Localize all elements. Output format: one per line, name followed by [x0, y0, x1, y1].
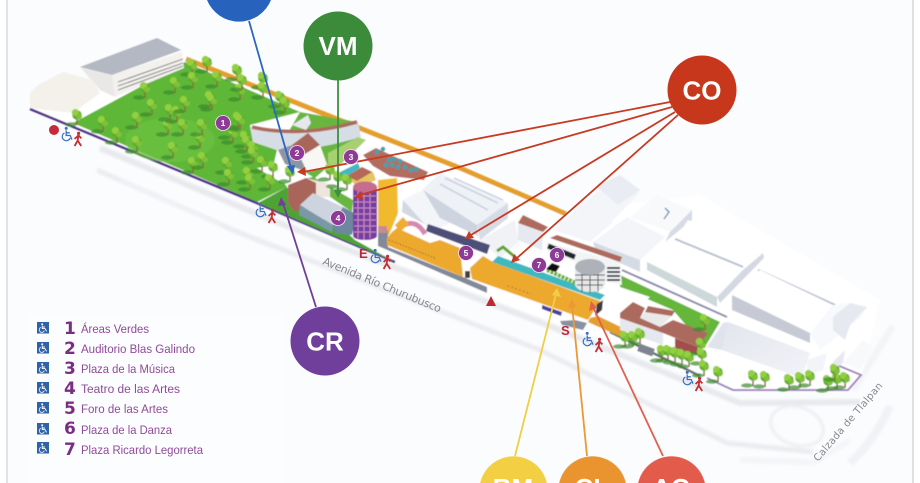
- badge 6: [550, 248, 564, 262]
- legend row 6: Plaza de la Danza: [81, 423, 172, 437]
- badge 4: [330, 210, 346, 226]
- legend row 4: 4: [64, 379, 76, 399]
- access point centre: [256, 203, 275, 223]
- white ground: [30, 55, 880, 391]
- legend: [37, 319, 203, 460]
- auditorium curved roof: [250, 115, 361, 150]
- teal roof: [492, 256, 605, 300]
- green arrow: [334, 80, 342, 198]
- legend row 1: 1: [64, 319, 76, 339]
- central white halls: [402, 173, 545, 268]
- legend row 5: [37, 399, 168, 419]
- legend row 1: [37, 319, 149, 339]
- brown block: [288, 178, 330, 212]
- circle CR: [290, 306, 360, 376]
- green park: [73, 62, 395, 262]
- legend row 1: Áreas Verdes: [81, 321, 149, 336]
- badge 1: 1: [221, 118, 226, 128]
- legend row 3: Plaza de la Música: [81, 362, 175, 376]
- legend row 2: 2: [64, 339, 76, 359]
- badge 5: 5: [464, 248, 469, 258]
- legend row 4: [37, 379, 180, 399]
- circle VM: [304, 12, 372, 80]
- orange arrow: [568, 299, 587, 456]
- access point E: [359, 246, 390, 269]
- orange perimeter strip: [186, 59, 566, 214]
- gray base: [378, 230, 487, 293]
- badge 4: 4: [336, 213, 341, 223]
- legend row 7: 7: [64, 440, 76, 460]
- badge 2: [290, 146, 304, 160]
- right white blocks: [553, 175, 873, 378]
- badge 6: 6: [555, 250, 560, 260]
- access point west: [49, 125, 81, 146]
- yellow arrow: [515, 288, 561, 456]
- circle CL: [558, 456, 626, 483]
- access point S: [561, 323, 602, 352]
- yellow building west: [387, 217, 463, 277]
- blue arrow: [249, 21, 295, 175]
- badge 7: [532, 258, 546, 272]
- legend row 6: [37, 419, 172, 439]
- circle VM: VM: [318, 31, 358, 61]
- parking building: [80, 38, 184, 97]
- red arrows: [297, 102, 678, 263]
- legend row 5: Foro de las Artes: [81, 402, 168, 416]
- Plaza de la Danza building: [546, 235, 622, 285]
- legend row 5: 5: [64, 399, 76, 419]
- category circles: [207, 0, 736, 376]
- red triangle marker: [486, 296, 496, 306]
- legend row 3: 3: [64, 359, 76, 379]
- legend row 7: Plaza Ricardo Legorreta: [81, 443, 203, 457]
- circle BM: [478, 456, 548, 483]
- yellow building east: [465, 256, 627, 338]
- connector lines: [249, 21, 678, 456]
- circle CO: CO: [682, 76, 722, 106]
- white roof beside lawn: [618, 287, 650, 303]
- badge 5: [458, 246, 474, 260]
- circle blue: [207, 0, 271, 22]
- pink structure: [402, 223, 425, 234]
- Auditorio Blas Galindo: [278, 133, 366, 172]
- purple arrow: [278, 197, 316, 307]
- access symbols: [49, 125, 702, 391]
- brown heritage buildings: [620, 302, 708, 356]
- street label: Avenida Río Churubusco: Avenida Río Churubusco: [321, 255, 443, 315]
- cylindrical building: [575, 259, 605, 293]
- access point S: S: [561, 323, 570, 338]
- badge 3: 3: [349, 152, 354, 162]
- circle CO: [668, 56, 736, 124]
- legend row 7: [37, 440, 203, 460]
- access point east: [683, 371, 702, 391]
- legend row 2: [37, 339, 195, 359]
- left white building: [30, 72, 100, 113]
- coral arrow: [589, 301, 663, 456]
- plaza white: [257, 163, 313, 183]
- Yellow tower: [378, 178, 398, 235]
- navy strip: [426, 224, 490, 254]
- green lawn: [620, 275, 720, 345]
- site boundary: [30, 109, 861, 390]
- street label: Calzada de Tlalpan: Calzada de Tlalpan: [812, 381, 885, 464]
- badge 1: [216, 116, 230, 130]
- roads: [97, 148, 893, 463]
- trees: [65, 56, 850, 393]
- number badges: [216, 116, 564, 272]
- badge 2: 2: [295, 148, 300, 158]
- legend row 6: 6: [64, 419, 76, 439]
- plaza de la musica buildings: [338, 147, 428, 188]
- badge 3: [344, 150, 358, 164]
- shrubs: [497, 247, 587, 288]
- circle AC: [636, 456, 706, 483]
- legend row 4: Teatro de las Artes: [81, 382, 180, 396]
- Purple tower: [353, 182, 377, 240]
- brown roof building north: [518, 215, 548, 250]
- Teatro de las Artes: [299, 193, 356, 235]
- badge 7: 7: [537, 260, 542, 270]
- legend row 3: [37, 359, 175, 379]
- legend row 2: Auditorio Blas Galindo: [81, 342, 195, 356]
- campus map: [30, 38, 880, 393]
- circle CR: CR: [306, 326, 344, 356]
- access point E: E: [359, 246, 368, 261]
